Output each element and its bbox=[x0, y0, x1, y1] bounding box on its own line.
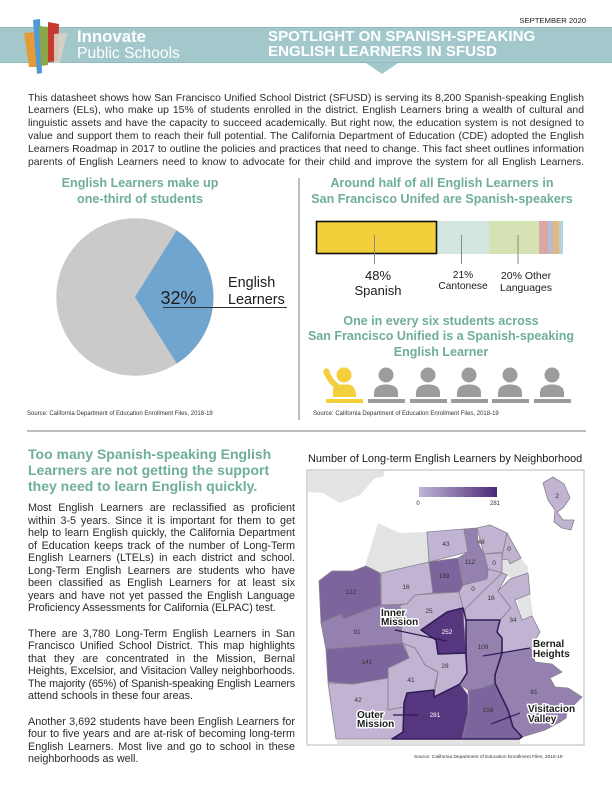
map callouts: Outer bbox=[357, 710, 384, 721]
map values: 42 bbox=[354, 697, 362, 704]
body text: Long-Term English Learners are students who have bbox=[28, 564, 295, 576]
map values: 16 bbox=[402, 584, 410, 591]
intro text: value and support them to reach their full potential. The California Department of Education (CDE) adopted the English bbox=[28, 131, 584, 142]
body text: help to learn English quickly, the California Department bbox=[28, 527, 295, 539]
map values: 81 bbox=[530, 689, 538, 696]
map: 0 bbox=[416, 501, 420, 507]
heading: languages: San Francisco Unifed are Spanish-speakers bbox=[311, 192, 573, 206]
intro text: Learners (ELs), who make up 15% of students enrolled in the district. English Learners bring a wealth of cultural and bbox=[28, 105, 584, 116]
heading: support: Learners are not getting the support bbox=[28, 462, 269, 478]
map: 281 bbox=[490, 501, 501, 507]
body text: Proficiency Assessments for California (ELPAC) test. bbox=[28, 602, 276, 614]
source: Source: California Department of Education Enrollment Files, 2018-19 bbox=[27, 411, 213, 417]
neighborhoods bbox=[319, 477, 582, 739]
leader lines bbox=[393, 630, 530, 724]
body text: four to five years and are at-risk of becoming long-term bbox=[28, 728, 295, 740]
map values: 48 bbox=[477, 539, 485, 546]
body text: English Learners. Most live and go to school in these bbox=[28, 740, 295, 752]
heading: pie: one-third of students bbox=[77, 192, 203, 206]
body text: English Learners (LTELs) in each district and school. bbox=[28, 552, 295, 564]
map values bbox=[346, 493, 559, 719]
body text: Francisco Unified School District. This map highlights bbox=[28, 640, 295, 652]
map values: 91 bbox=[353, 629, 361, 636]
panel: languages bbox=[308, 176, 574, 417]
map values: 41 bbox=[407, 677, 415, 684]
body text: Heights, Excelsior, and Visitacion Valley neighborhoods. bbox=[28, 665, 295, 677]
stacked bar chart: 20% Other bbox=[501, 270, 552, 282]
map values: 25 bbox=[425, 608, 433, 615]
body text: of Education keeps track of the number of Long-Term bbox=[28, 540, 295, 552]
map callouts: Valley bbox=[528, 714, 557, 725]
body text: that they are concentrated in the Mission, Bernal bbox=[28, 652, 295, 664]
map values: 16 bbox=[487, 595, 495, 602]
source: map: Source: California Department of Education Enrollment Files, 2018-19 bbox=[414, 755, 563, 760]
stacked bar chart: 21% bbox=[453, 270, 473, 281]
heading: one in six: San Francisco Unified is a Spanish-speaking bbox=[308, 329, 574, 343]
pie chart: Learners bbox=[228, 292, 285, 308]
pie chart: English bbox=[228, 275, 275, 291]
heading: support: they need to learn English quickly. bbox=[28, 478, 257, 494]
stacked bar chart: Cantonese bbox=[438, 281, 488, 292]
map values: 281 bbox=[430, 712, 441, 719]
title bbox=[268, 28, 535, 60]
body text: within 3-5 years. Since it is important for them to get bbox=[28, 514, 295, 526]
heading: pie bbox=[62, 176, 218, 206]
map callouts: Inner bbox=[381, 608, 406, 619]
map callouts: Mission bbox=[357, 719, 394, 730]
body text: Another 3,692 students have been English Learners for bbox=[28, 716, 295, 728]
map values: 158 bbox=[483, 707, 494, 714]
header band bbox=[0, 27, 612, 74]
map bbox=[306, 469, 585, 746]
body text: There are 3,780 Long-Term English Learners in San bbox=[28, 628, 295, 640]
land bbox=[308, 471, 533, 744]
map values: 109 bbox=[478, 644, 489, 651]
stacked bar chart: Spanish bbox=[355, 283, 401, 298]
heading: support bbox=[28, 446, 271, 494]
source: Source: California Department of Education Enrollment Files, 2018-19 bbox=[313, 411, 499, 417]
heading: one in six bbox=[308, 314, 574, 358]
map values: 43 bbox=[442, 541, 450, 548]
logo bbox=[24, 19, 180, 74]
body text: neighborhoods as well. bbox=[28, 753, 138, 765]
map values: 0 bbox=[471, 586, 475, 593]
map values: 34 bbox=[509, 617, 517, 624]
body text: Most English Learners are reclassified as proficient bbox=[28, 502, 295, 514]
intro text: parents of English Learners need to know to advocate for their child and improve the system for all English Learners. bbox=[28, 156, 584, 168]
mission district outline bbox=[392, 608, 522, 739]
heading: support: Too many Spanish-speaking English bbox=[28, 446, 271, 462]
body text bbox=[28, 502, 295, 765]
heading: languages bbox=[311, 176, 573, 206]
intro text: Learners Roadmap in 2017 to outline the policies and practices that need to change. This fact sheet outlines information bbox=[28, 144, 584, 155]
body text: years and have not yet passed the English Language bbox=[28, 590, 295, 602]
map values: 0 bbox=[507, 546, 511, 553]
map callouts: Visitacion bbox=[528, 704, 575, 715]
icons: six students bbox=[323, 368, 571, 403]
pie chart bbox=[56, 218, 287, 376]
heading: pie: English Learners make up bbox=[62, 176, 218, 190]
map title: Number of Long-term English Learners by Neighborhood bbox=[308, 453, 582, 465]
heading: one in six: English Learner bbox=[394, 344, 488, 358]
body text: attend schools in these four areas. bbox=[28, 690, 193, 702]
intro text bbox=[28, 92, 584, 168]
map callouts: Bernal bbox=[533, 639, 564, 650]
map callouts bbox=[357, 608, 575, 730]
stacked bar chart: Languages bbox=[500, 282, 552, 294]
map values: 28 bbox=[441, 663, 449, 670]
heading: languages: Around half of all English Learners in bbox=[330, 176, 554, 190]
map values: 252 bbox=[442, 629, 453, 636]
logo name: Innovate bbox=[77, 27, 146, 46]
panel: english learners pie bbox=[27, 176, 287, 417]
heading: one in six: One in every six students across bbox=[343, 314, 539, 328]
stacked bar chart: 48% bbox=[365, 268, 391, 283]
body text: been classified as English Learners for at least six bbox=[28, 577, 295, 589]
intro text: linguistic assets and have the capacity to succeed academically. But right now, the education system is not designed to bbox=[28, 118, 584, 129]
map values: 122 bbox=[346, 589, 357, 596]
intro text: This datasheet shows how San Francisco Unified School District (SFUSD) is serving its 8,200 Spanish-speaking English bbox=[28, 92, 584, 104]
map values: 0 bbox=[492, 560, 496, 567]
title: SPOTLIGHT ON SPANISH-SPEAKING bbox=[268, 28, 535, 45]
map values: 2 bbox=[555, 493, 559, 500]
title: ENGLISH LEARNERS IN SFUSD bbox=[268, 43, 497, 60]
map values: 141 bbox=[362, 659, 373, 666]
stacked bar chart bbox=[316, 220, 563, 298]
date: SEPTEMBER 2020 bbox=[519, 16, 586, 25]
body text: The majority (65%) of Spanish-speaking English Learners bbox=[28, 678, 295, 690]
map values: 139 bbox=[439, 573, 450, 580]
map callouts: Mission bbox=[381, 617, 418, 628]
logo subtitle: Public Schools bbox=[77, 44, 180, 62]
map values: 112 bbox=[465, 559, 476, 566]
map callouts: Heights bbox=[533, 649, 570, 660]
pie chart: 32% bbox=[160, 288, 197, 308]
